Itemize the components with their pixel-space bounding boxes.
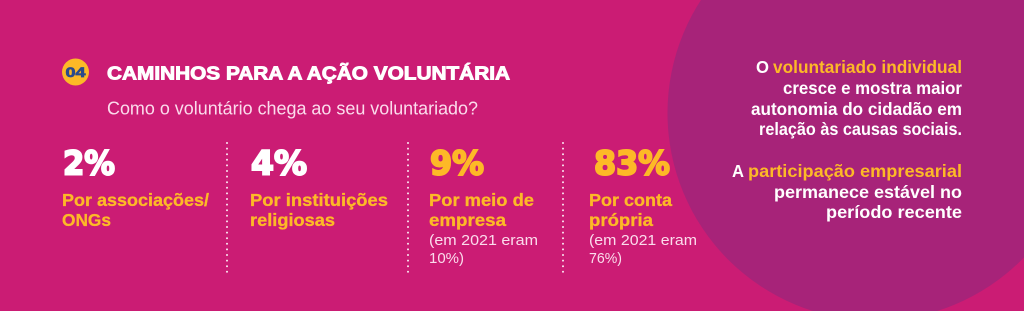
stat: 83% por conta própria (589, 144, 697, 267)
callout: voluntariado individual: cresce e mostra maior (783, 78, 962, 98)
stat: 4% por instituições religiosas: Por instituições (250, 190, 388, 210)
title: CAMINHOS PARA A AÇÃO VOLUNTÁRIA (107, 62, 510, 84)
callout: voluntariado individual: relação às causas sociais. (759, 119, 962, 139)
stat: 9% por meio de empresa: empresa (429, 210, 506, 230)
stat: 2% por associações/ONGs: ONGs (62, 210, 111, 230)
callout: participação empresarial: participação empresarial (748, 161, 962, 181)
callout: participação empresarial (732, 161, 962, 222)
callout: participação empresarial: período recente (826, 202, 962, 222)
stat: 83% por conta própria: Por conta (589, 190, 672, 210)
stat: 2% por associações/ONGs (62, 144, 209, 230)
callout: participação empresarial: A (732, 161, 744, 181)
stat: 4% por instituições religiosas (250, 144, 388, 230)
stat: 83% por conta própria: própria (589, 210, 653, 230)
stat: 9% por meio de empresa: 9% (430, 144, 484, 182)
subtitle: Como o voluntário chega ao seu voluntariado? (107, 98, 478, 118)
stat: 2% por associações/ONGs: 2% (63, 144, 115, 182)
callout: voluntariado individual: voluntariado individual (773, 57, 962, 77)
stat: 4% por instituições religiosas: 4% (251, 144, 307, 182)
stat: 83% por conta própria: 83% (594, 144, 670, 182)
callout: participação empresarial: permanece estável no (774, 182, 962, 202)
stat: 9% por meio de empresa: Por meio de (429, 190, 534, 210)
section header (62, 58, 510, 118)
stat: 9% por meio de empresa: 10%) (429, 250, 464, 267)
callout: voluntariado individual (751, 57, 962, 139)
callout: voluntariado individual: autonomia do cidadão em (751, 99, 962, 119)
stat: 9% por meio de empresa (429, 144, 538, 267)
icon: number badge 04 (62, 58, 89, 86)
callout: voluntariado individual: O (756, 57, 769, 77)
background circle panel (668, 0, 1024, 311)
stat: 2% por associações/ONGs: Por associações/ (62, 190, 209, 210)
stat: 83% por conta própria: 76%) (589, 250, 622, 267)
icon: number badge 04: 04 (66, 64, 86, 80)
stat: 83% por conta própria: (em 2021 eram (589, 232, 697, 249)
stat: 9% por meio de empresa: (em 2021 eram (429, 232, 538, 249)
stat: 4% por instituições religiosas: religiosas (250, 210, 335, 230)
